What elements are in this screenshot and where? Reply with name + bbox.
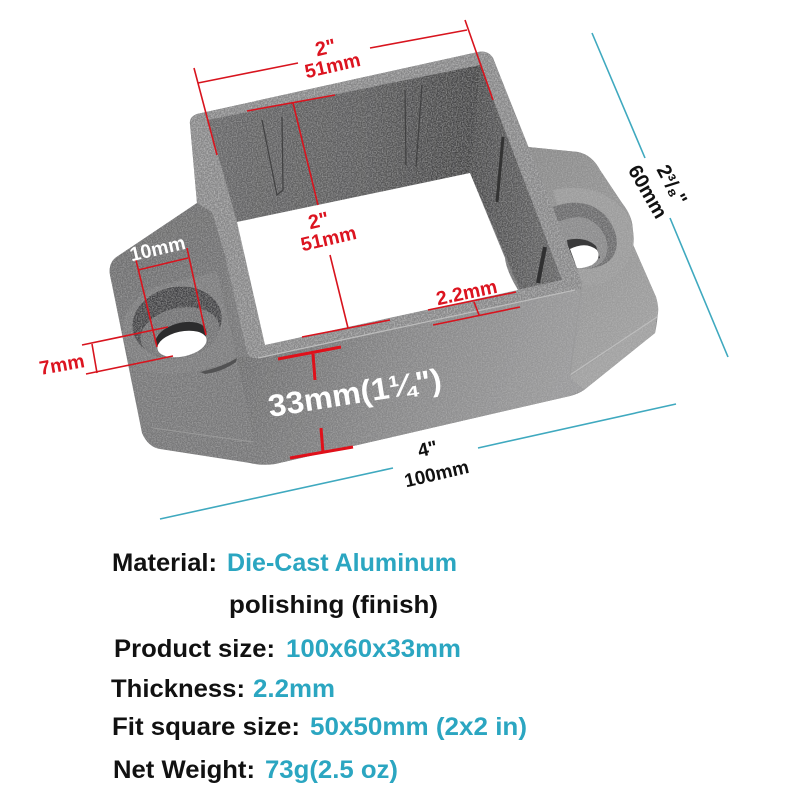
spec: material: Material:: [112, 549, 217, 577]
dimension: wall thickness: 2.2mm: [434, 276, 499, 310]
spec: net weight: [113, 756, 398, 784]
ear plate shadow: [200, 358, 237, 374]
dimension: hole height: 7mm: [38, 350, 86, 380]
front face: [237, 288, 584, 464]
spec: fit square size: Fit square size:: [112, 713, 300, 741]
dimension: inner width 2 in: 2": [306, 208, 331, 234]
dimension: inner width 2 in: 51mm: [299, 222, 359, 256]
spec: net weight: Net Weight:: [113, 756, 255, 784]
spec: net weight: 73g(2.5 oz): [265, 756, 398, 784]
dimension: wall thickness: [428, 276, 520, 325]
right hole: [567, 239, 600, 268]
left flange top: [110, 203, 237, 358]
dimension: depth 60mm: 2³/₈": [652, 161, 691, 209]
right counterbore: [553, 188, 634, 285]
spec: thickness: Thickness:: [111, 675, 245, 703]
right flange top: [528, 147, 658, 377]
spec: product size: Product size:: [114, 635, 275, 663]
spec: thickness: [111, 675, 335, 703]
right flange lower face: [570, 317, 657, 390]
silhouette: [110, 52, 658, 465]
dimension: outer width 2 in: [194, 20, 493, 155]
spec: finish: polishing (finish): [229, 591, 438, 619]
dimension: hole height: [38, 327, 173, 380]
back wall: [208, 65, 490, 222]
dimension: hole width: [128, 232, 206, 347]
left hole: [152, 317, 210, 361]
dimension: hole width: 10mm: [128, 232, 188, 266]
right wall: [470, 65, 562, 290]
dimension: height: 33mm(1¼"): [266, 362, 444, 424]
dimension: length 100mm: 100mm: [402, 457, 471, 492]
dimension: depth 60mm: 60mm: [623, 161, 671, 223]
left ear ring: [123, 272, 237, 374]
spec: product size: 100x60x33mm: [286, 635, 461, 663]
spec: material: Die-Cast Aluminum: [227, 549, 457, 577]
dimension: height: [266, 347, 444, 458]
spec: fit square size: [112, 713, 527, 741]
spec: thickness: 2.2mm: [253, 675, 335, 703]
dimension: inner width 2 in: [247, 95, 390, 337]
bracket illustration: [110, 52, 658, 465]
dimension: outer width 2 in: 51mm: [303, 49, 363, 83]
left flange side: [128, 358, 257, 443]
rim highlights: [258, 290, 657, 375]
spec: product size: [114, 635, 461, 663]
dimension: outer width 2 in: 2": [313, 35, 338, 61]
dimension: length 100mm: 4": [416, 437, 440, 462]
rim: [190, 52, 582, 358]
dimension: depth 60mm: [592, 33, 728, 357]
left counterbore: [126, 278, 228, 366]
inner opening: [237, 173, 518, 345]
spec: material: [112, 549, 457, 577]
spec: fit square size: 50x50mm (2x2 in): [310, 713, 527, 741]
back wall ribs: [262, 85, 545, 283]
dimension: length 100mm: [160, 404, 676, 519]
